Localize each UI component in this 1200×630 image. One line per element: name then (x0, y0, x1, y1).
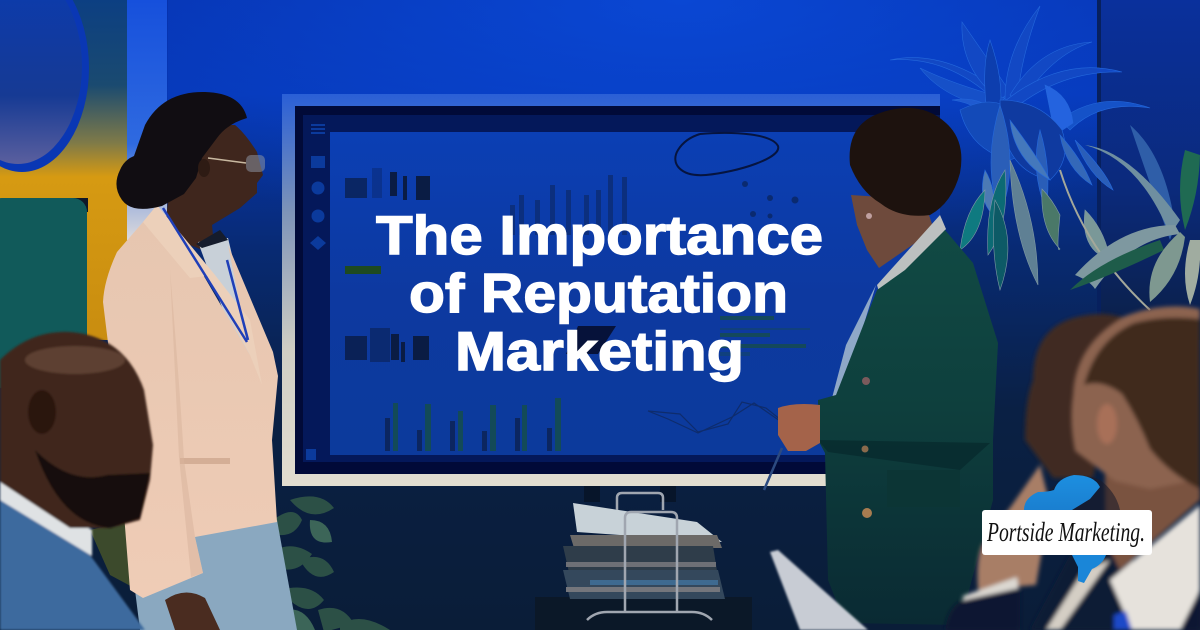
dark scarf (196, 230, 228, 248)
wire rack (587, 493, 712, 620)
jeans (135, 520, 297, 630)
ear (198, 159, 210, 177)
glasses lens (246, 155, 265, 172)
person: presenter in green jacket (764, 108, 998, 625)
neck and face (165, 125, 263, 255)
hair (1084, 318, 1200, 489)
mid blue leaves (982, 105, 1113, 215)
title (376, 204, 823, 382)
bottom bar chart (385, 398, 561, 451)
lower grey-teal leaves (960, 160, 1110, 290)
left wall with yellow panel (0, 0, 167, 340)
sidebar (303, 115, 940, 462)
background bar chart (510, 175, 627, 235)
neck (1105, 450, 1200, 570)
ear (28, 390, 56, 434)
pen (764, 448, 782, 490)
person: presenter in pink blazer (103, 92, 297, 630)
collar (0, 480, 92, 556)
table (535, 597, 752, 630)
inner shirt (832, 285, 876, 398)
scatter dots (742, 181, 798, 218)
lanyard (163, 208, 248, 342)
dark shape behind title (566, 326, 616, 354)
lapel (143, 205, 262, 385)
shirt (198, 238, 253, 361)
cuff (963, 577, 1019, 605)
neck (851, 195, 934, 268)
pocket flap (887, 470, 960, 507)
logo: Portside Marketing (982, 475, 1152, 583)
person: man in blue suit, foreground left (0, 332, 153, 630)
suit (0, 482, 145, 630)
plant: large blue dracaena (890, 6, 1150, 310)
hair (850, 108, 961, 216)
glasses (208, 158, 246, 163)
hands (778, 404, 820, 451)
title: of Reputation (409, 262, 788, 324)
hand and forearm (978, 465, 1050, 590)
head (1071, 306, 1200, 489)
paper stack (573, 503, 722, 542)
earring (866, 213, 872, 219)
tray 2 (563, 546, 718, 577)
ear (1097, 404, 1117, 444)
suit corner (1180, 590, 1200, 630)
dracaena stem (1060, 170, 1150, 310)
right horizontal bars (720, 316, 810, 356)
sleeve shading (818, 440, 990, 470)
blazer body (103, 205, 278, 598)
head (0, 332, 153, 528)
hand-drawn circle on screen (675, 133, 778, 175)
monitor screen (330, 132, 940, 455)
head highlight (25, 346, 125, 374)
logo plate (982, 510, 1152, 555)
tray 3 (563, 570, 725, 599)
small heatmap charts (345, 168, 430, 362)
plant: olive foliage behind man (90, 520, 138, 590)
title: The Importance (376, 204, 823, 266)
upper blue leaves (890, 6, 1150, 180)
sleeve shading (170, 270, 203, 577)
plant: right dracaena (1070, 125, 1200, 305)
paper tray on table (535, 486, 752, 630)
shirt collar (877, 215, 946, 295)
logo wordmark: Portside Marketing. (986, 517, 1145, 547)
hair (1025, 314, 1123, 478)
green legend swatch (345, 266, 381, 274)
plant: small plant under monitor (262, 496, 390, 630)
button (862, 446, 868, 452)
line chart (648, 402, 810, 433)
person: bearded man, foreground right (1030, 306, 1200, 630)
hand (165, 592, 220, 630)
green couch back (0, 198, 88, 388)
round mirror (0, 0, 89, 172)
monitor (282, 94, 940, 486)
title: Marketing (455, 320, 744, 382)
button (862, 508, 872, 518)
navy jacket (1030, 550, 1150, 630)
monitor bezel (295, 106, 940, 474)
hair (116, 92, 247, 209)
shirt strip (1046, 560, 1110, 630)
jacket (818, 230, 998, 625)
stand pole (584, 486, 600, 502)
foreground paper (770, 550, 868, 630)
pocket (180, 458, 230, 464)
globe (1024, 475, 1120, 583)
tray 1 (570, 535, 722, 548)
monitor frame (282, 94, 940, 486)
tie tip (1114, 611, 1132, 630)
button (862, 377, 870, 385)
person: curly-haired attendee, foreground right (945, 314, 1123, 630)
navy sleeve (945, 588, 1020, 630)
beard (35, 450, 150, 528)
collar and shirt (1110, 505, 1200, 630)
screen sidebar icons (306, 124, 326, 460)
